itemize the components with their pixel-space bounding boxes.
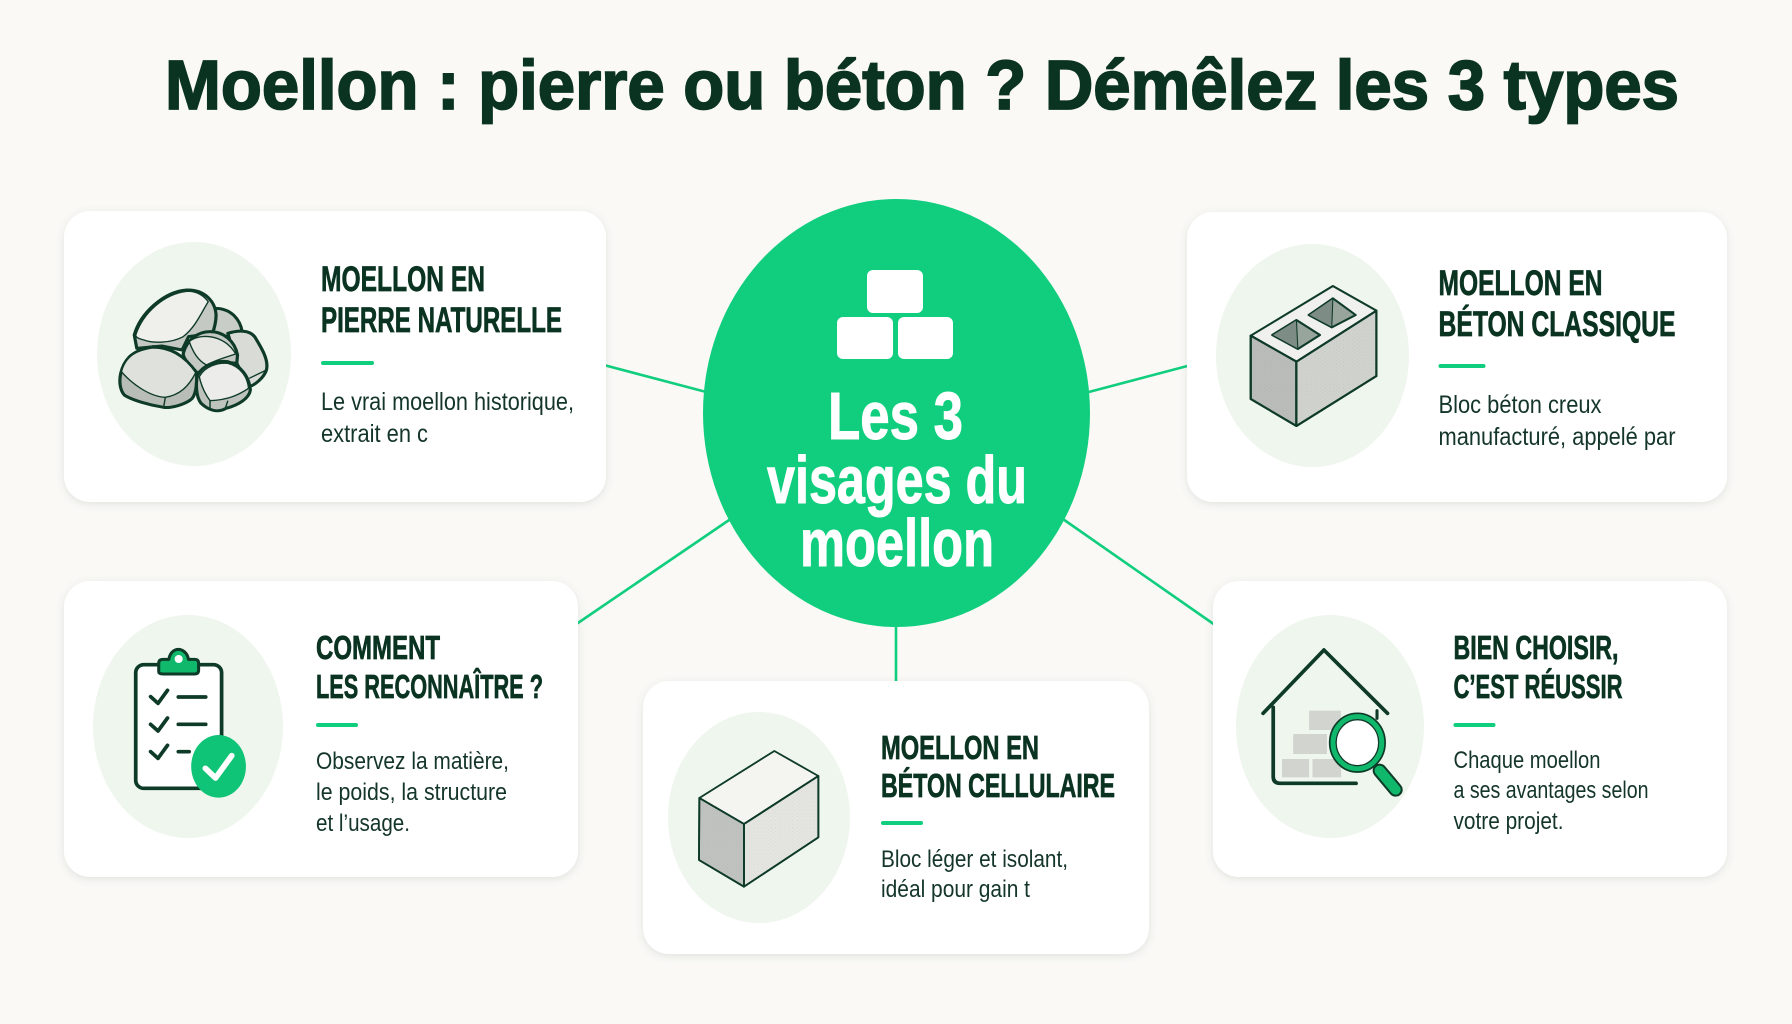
heading: C’EST RÉUSSIR — [1454, 668, 1623, 705]
central hub — [703, 199, 1090, 627]
text block: extrait en c — [321, 420, 428, 448]
heading — [316, 629, 543, 705]
heading: MOELLON EN — [1438, 264, 1602, 303]
heading: LES RECONNAÎTRE ? — [316, 668, 543, 705]
text block: votre projet. — [1454, 808, 1564, 835]
heading — [1438, 264, 1676, 344]
heading: MOELLON EN — [881, 729, 1039, 766]
text block: a ses avantages selon — [1454, 777, 1648, 804]
heading — [881, 729, 1115, 804]
text block: Bloc léger et isolant, — [881, 846, 1068, 873]
text block — [316, 748, 509, 837]
text block: idéal pour gain t — [881, 876, 1030, 903]
text block — [881, 846, 1068, 903]
icon: hollow concrete block — [1251, 286, 1376, 426]
heading: BIEN CHOISIR, — [1454, 629, 1618, 666]
heading: PIERRE NATURELLE — [321, 301, 562, 340]
icon: natural stones — [120, 290, 267, 411]
heading: MOELLON EN — [321, 260, 485, 299]
panel: comment les reconnaître — [64, 581, 578, 877]
panel: bien choisir — [1213, 581, 1727, 877]
hub title — [767, 379, 1027, 581]
hub title: moellon — [800, 506, 994, 581]
heading — [1454, 629, 1623, 705]
heading: COMMENT — [316, 629, 440, 666]
heading — [321, 260, 562, 340]
title: Moellon : pierre ou béton ? Démêlez les 3 types — [165, 46, 1679, 124]
hub title: visages du — [767, 443, 1027, 518]
text block: Bloc béton creux — [1438, 391, 1602, 419]
heading: BÉTON CELLULAIRE — [881, 767, 1115, 804]
hub title: Les 3 — [828, 379, 963, 454]
panel: moellon en pierre naturelle — [64, 211, 606, 502]
text block: le poids, la structure — [316, 779, 507, 806]
icon: three stacked blocks — [837, 270, 953, 359]
icon: aerated concrete block — [699, 751, 818, 887]
text block: Le vrai moellon historique, — [321, 388, 574, 416]
text block — [1438, 391, 1676, 451]
panel: moellon en béton classique — [1187, 212, 1727, 502]
text block: Observez la matière, — [316, 748, 509, 775]
text block — [1454, 747, 1648, 835]
panel: moellon en béton cellulaire — [643, 681, 1149, 954]
icon: clipboard checklist — [136, 649, 246, 798]
text block: manufacturé, appelé par — [1438, 423, 1676, 451]
text block — [321, 388, 574, 448]
icon: house with magnifier — [1263, 650, 1396, 790]
connector lines — [575, 364, 1215, 690]
heading: BÉTON CLASSIQUE — [1438, 304, 1676, 344]
text block: et l’usage. — [316, 810, 410, 837]
text block: Chaque moellon — [1454, 747, 1600, 774]
